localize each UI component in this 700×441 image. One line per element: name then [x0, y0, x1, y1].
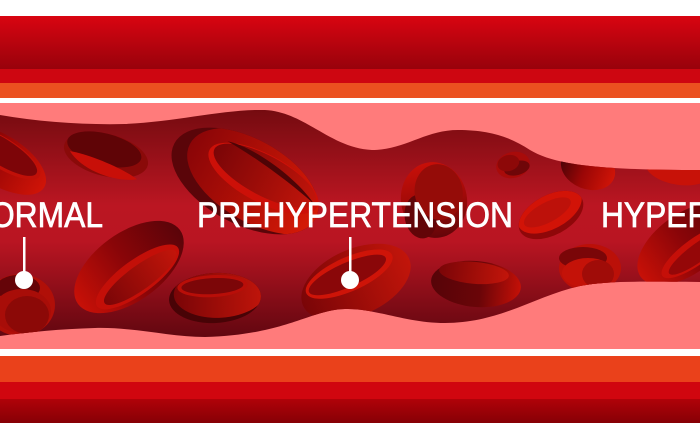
marker: normal: [15, 237, 33, 289]
red blood cell 7: [647, 169, 700, 186]
plaque layer: [0, 103, 700, 349]
bottom artery wall: [0, 356, 700, 423]
red blood cell 8: [518, 190, 584, 240]
red blood cell 15: [0, 274, 55, 336]
red blood cell 14: [638, 206, 700, 282]
marker: prehypertension: [341, 237, 359, 289]
red blood cell 1: [0, 132, 46, 195]
top artery wall: [0, 16, 700, 98]
red blood cell 10: [169, 272, 261, 324]
label: prehypertension: PREHYPERTENSION: [197, 196, 513, 235]
red blood cell 9: [74, 220, 184, 314]
red blood cell 6: [560, 162, 616, 190]
red blood cell 11: [302, 244, 411, 316]
vessel lumen with red blood cells: [0, 99, 700, 345]
red blood cell 2: [64, 131, 148, 180]
red blood cell 12: [431, 260, 521, 307]
red blood cell 3 large: [172, 128, 318, 234]
red blood cell 5 small: [496, 152, 530, 178]
red blood cell 13: [559, 244, 621, 292]
red blood cell 4: [400, 162, 468, 238]
